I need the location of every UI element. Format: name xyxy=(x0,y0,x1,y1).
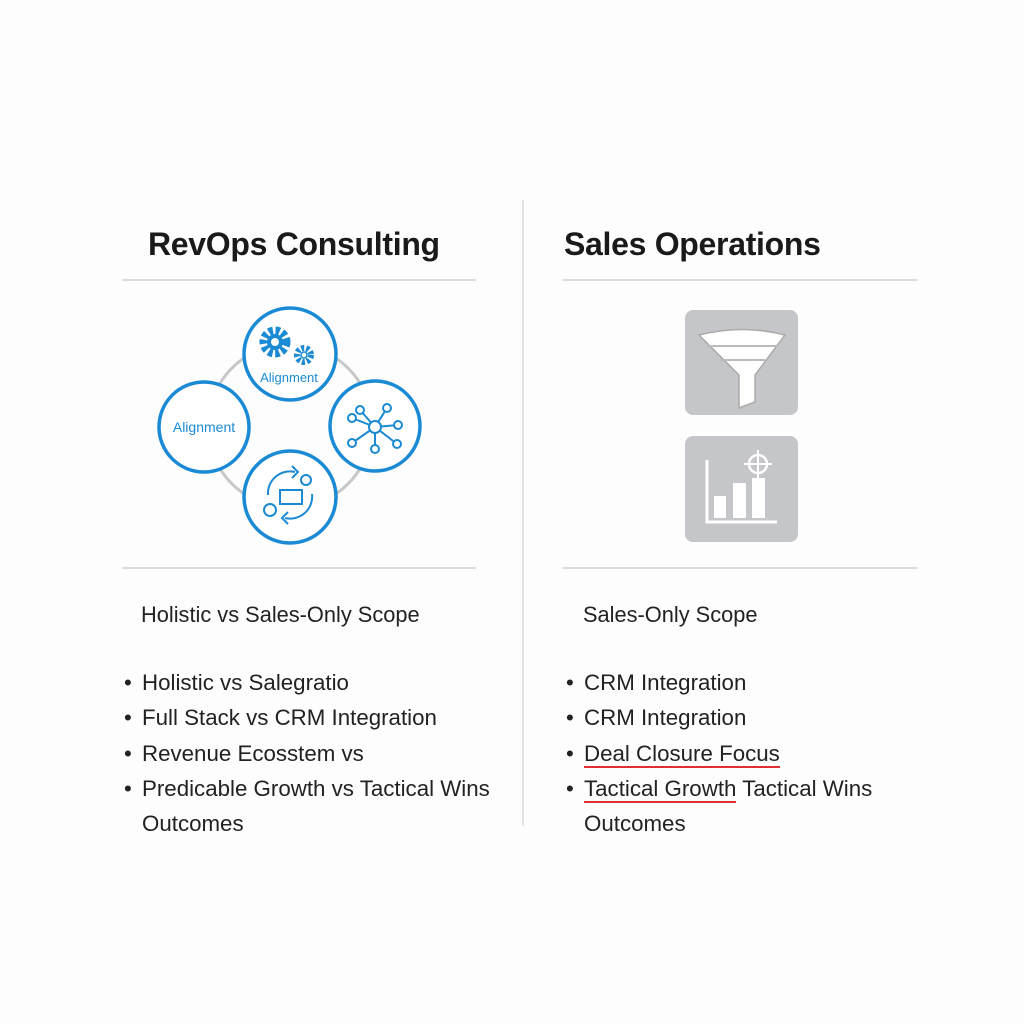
icon: cycle circle xyxy=(244,451,336,543)
icon: alignment circle xyxy=(159,382,249,472)
list left: Predicable Growth vs Tactical Wins xyxy=(142,776,490,801)
diagram: four circles xyxy=(157,306,422,545)
title: RevOps Consulting: RevOps Consulting xyxy=(148,226,440,262)
list right: CRM Integration xyxy=(584,705,746,730)
icon: gears circle xyxy=(244,308,336,400)
icon: alignment circle: Alignment xyxy=(173,419,235,435)
subheading left: Holistic vs Sales-Only Scope xyxy=(141,602,420,627)
icon: funnel box xyxy=(685,310,798,415)
icon: chart box xyxy=(685,436,798,542)
list right xyxy=(566,670,872,836)
list left: Holistic vs Salegratio xyxy=(142,670,349,695)
list right: Deal Closure Focus xyxy=(584,741,780,766)
icon: gears circle: Alignment xyxy=(260,370,318,385)
list left: Full Stack vs CRM Integration xyxy=(142,705,437,730)
list right: Outcomes xyxy=(584,811,686,836)
divider xyxy=(522,200,524,826)
title: Sales Operations: Sales Operations xyxy=(564,226,821,262)
list right: CRM Integration xyxy=(584,670,746,695)
icon: network circle xyxy=(330,381,420,471)
subheading right: Sales-Only Scope xyxy=(583,602,757,627)
list right: Tactical Growth Tactical Wins xyxy=(584,776,872,801)
list left: Revenue Ecosstem vs xyxy=(142,741,364,766)
list left xyxy=(124,670,490,836)
list left: Outcomes xyxy=(142,811,244,836)
